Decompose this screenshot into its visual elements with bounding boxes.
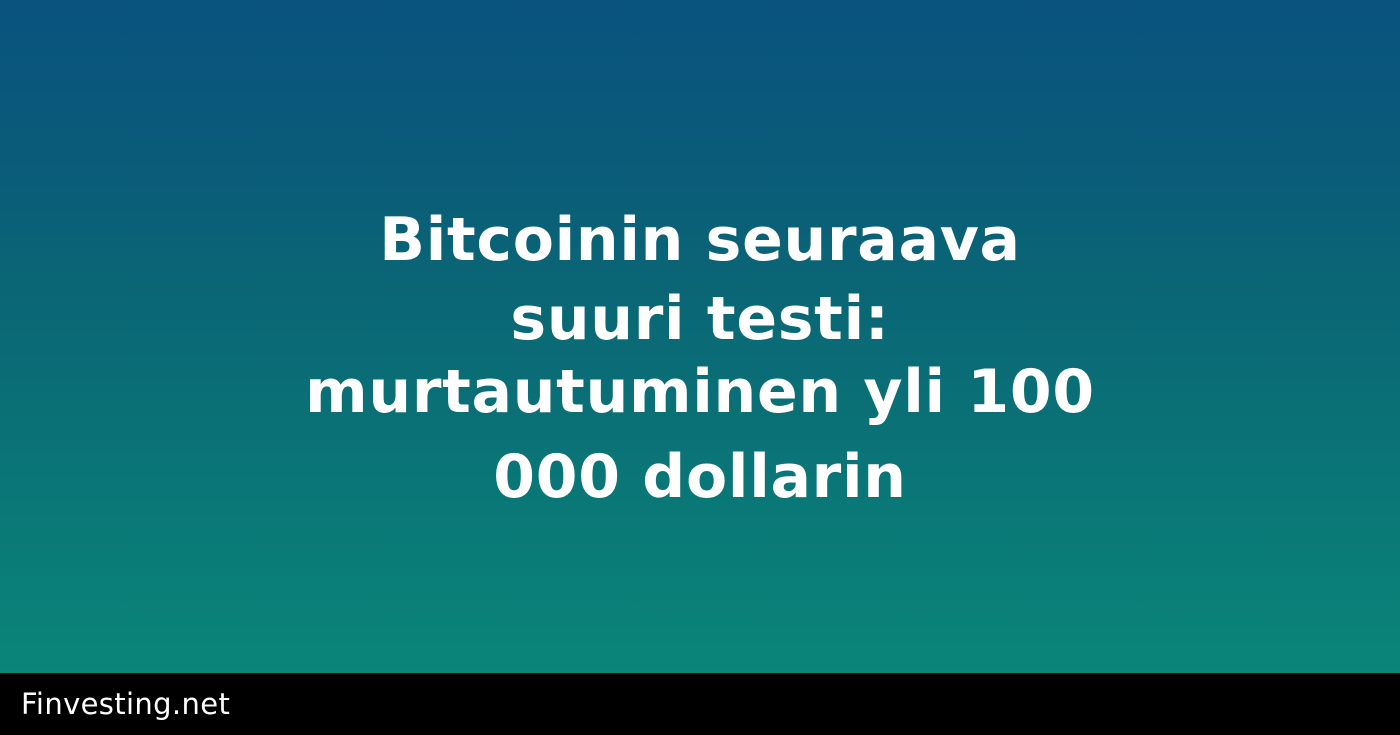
title: suuri testi: (510, 284, 890, 354)
title: 000 dollarin (493, 442, 907, 512)
title (305, 205, 1095, 512)
title: murtautuminen yli 100 (305, 357, 1095, 427)
footer bar (0, 673, 1400, 735)
title: Bitcoinin seuraava (379, 205, 1021, 275)
brand name: Finvesting.net (21, 687, 230, 721)
